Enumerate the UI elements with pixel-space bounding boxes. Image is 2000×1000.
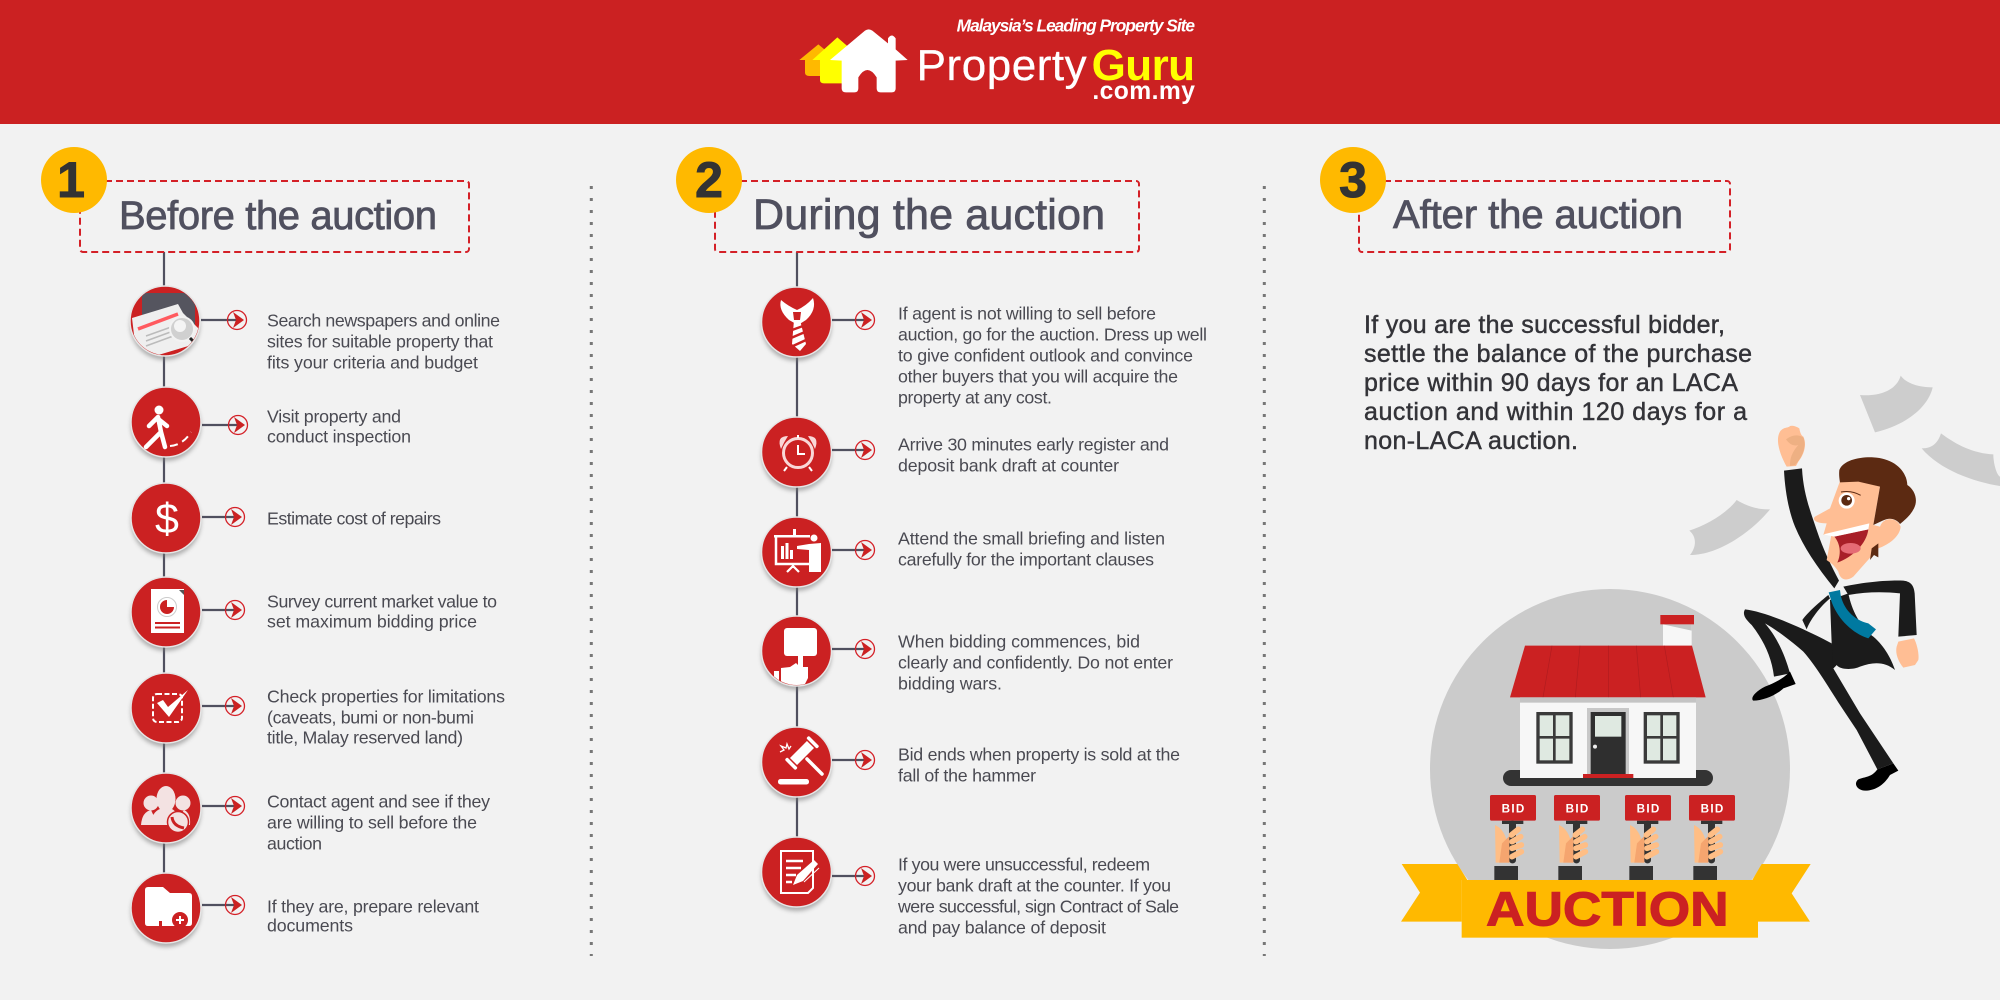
paragraph: settle the balance of the purchase xyxy=(1364,340,1752,368)
arrow xyxy=(202,600,244,620)
arrow xyxy=(832,750,874,770)
text: Bid ends when property is sold at the xyxy=(898,744,1180,764)
text xyxy=(267,406,411,446)
text: If you were unsuccessful, redeem xyxy=(898,854,1150,874)
logo: yellow house xyxy=(812,37,863,83)
text: auction xyxy=(267,833,322,853)
step: prepare documents xyxy=(131,873,479,947)
paragraph: price within 90 days for an LACA xyxy=(1364,369,1738,397)
raised arm xyxy=(1784,468,1839,588)
text xyxy=(897,854,1179,937)
text: auction, go for the auction. Dress up well xyxy=(898,324,1207,344)
icon: tie xyxy=(780,298,814,351)
flying paper 1 xyxy=(1860,376,1933,432)
text: your bank draft at the counter. If you xyxy=(898,875,1171,895)
text xyxy=(898,631,1173,693)
text: Attend the small briefing and listen xyxy=(898,528,1165,548)
shoe lower xyxy=(1856,763,1898,791)
icon: people and phone xyxy=(141,786,190,832)
text: carefully for the important clauses xyxy=(898,549,1154,569)
bid paddle 4: BID xyxy=(1701,803,1723,816)
step: check limitations xyxy=(131,673,505,747)
step: estimate repairs xyxy=(131,483,441,557)
text: Contact agent and see if they xyxy=(267,791,490,811)
heading: During the auction xyxy=(753,191,1105,239)
text: were successful, sign Contract of Sale xyxy=(897,896,1179,916)
step: dress up xyxy=(762,287,1207,407)
icon: folder xyxy=(145,887,192,928)
arrow xyxy=(201,310,246,330)
paragraph: non-LACA auction. xyxy=(1364,427,1578,455)
bid paddle 3 xyxy=(1625,795,1671,881)
panel: before the auction xyxy=(41,147,505,947)
icon: presenter xyxy=(774,529,821,572)
jacket xyxy=(1830,593,1895,670)
text: title, Malay reserved land) xyxy=(267,727,463,747)
bid paddle 3: BID xyxy=(1637,803,1659,816)
man figure xyxy=(1744,426,1919,791)
panel: after the auction xyxy=(1320,147,2000,949)
illustration: cheering man and papers xyxy=(1689,376,2000,791)
house walls xyxy=(1520,697,1696,778)
logo: orange house xyxy=(799,44,837,76)
logo xyxy=(799,16,1195,105)
heading: Before the auction xyxy=(119,194,437,238)
text: fits your criteria and budget xyxy=(267,352,478,372)
text: Arrive 30 minutes early register and xyxy=(898,434,1169,454)
text xyxy=(898,434,1169,475)
grey backdrop circle xyxy=(1430,589,1790,949)
icon: dollar: $ xyxy=(155,495,179,543)
text: are willing to sell before the xyxy=(267,812,477,832)
shoe upper xyxy=(1752,672,1796,701)
number badge 3 xyxy=(1320,147,1386,213)
bid paddle 1: BID xyxy=(1502,803,1524,816)
arrow xyxy=(202,508,244,526)
icon: gavel xyxy=(778,736,822,784)
divider right xyxy=(1263,186,1266,956)
flying paper 2 xyxy=(1922,433,2000,486)
text: sites for suitable property that xyxy=(267,331,493,351)
text: clearly and confidently. Do not enter xyxy=(898,652,1173,672)
face and ear xyxy=(1814,477,1901,579)
text: Estimate cost of repairs xyxy=(267,508,441,528)
panel: during the auction xyxy=(676,147,1207,937)
tie xyxy=(1829,590,1876,638)
bid paddle 4 xyxy=(1689,795,1735,881)
heading box xyxy=(80,181,469,252)
text xyxy=(898,744,1180,785)
illustration: auction house xyxy=(1401,589,1811,949)
house base xyxy=(1503,770,1713,786)
logo: tagline: Malaysia’s Leading Property Site xyxy=(957,16,1195,36)
icon: report with pie xyxy=(151,589,184,633)
paragraph xyxy=(1364,311,1752,455)
mouth xyxy=(1823,523,1869,563)
bid paddle 2 xyxy=(1554,795,1600,881)
text: Visit property and xyxy=(267,406,401,426)
arrow xyxy=(832,866,874,886)
connector line xyxy=(163,252,165,908)
text: and pay balance of deposit xyxy=(898,917,1106,937)
lowered hand xyxy=(1896,638,1919,668)
text: If agent is not willing to sell before xyxy=(898,303,1156,323)
lapel xyxy=(1802,595,1830,629)
flying paper 3 xyxy=(1689,500,1770,555)
roof xyxy=(1510,646,1706,697)
step: hammer falls xyxy=(762,727,1180,801)
logo: domain: .com.my xyxy=(1092,78,1195,105)
number badge 2: 2 xyxy=(695,152,723,208)
arrow xyxy=(202,416,248,434)
text xyxy=(898,528,1165,569)
heading: After the auction xyxy=(1393,193,1683,237)
text: other buyers that you will acquire the xyxy=(898,366,1178,386)
text: documents xyxy=(267,915,353,935)
text xyxy=(267,591,497,631)
text: If they are, prepare relevant xyxy=(267,896,479,916)
text xyxy=(267,310,500,372)
door xyxy=(1583,708,1633,778)
right window xyxy=(1645,714,1678,762)
number badge 1 xyxy=(41,147,107,213)
logo: Guru wordmark: Guru xyxy=(1092,41,1195,90)
text: bidding wars. xyxy=(898,673,1002,693)
number badge 3: 3 xyxy=(1339,152,1367,208)
step: survey market value xyxy=(131,577,497,651)
icon: checkbox xyxy=(153,690,188,722)
ribbon banner xyxy=(1401,864,1811,938)
arrow xyxy=(202,696,244,716)
raised fist xyxy=(1778,426,1805,467)
arrow xyxy=(832,640,874,658)
number badge 2 xyxy=(676,147,742,213)
text: fall of the hammer xyxy=(898,765,1036,785)
text xyxy=(267,686,505,747)
text: Search newspapers and online xyxy=(267,310,500,330)
header band xyxy=(0,0,2000,124)
arrow xyxy=(832,310,874,330)
text xyxy=(267,791,490,853)
connector line xyxy=(796,252,798,872)
icon: contract and pen xyxy=(781,851,819,893)
text xyxy=(898,303,1207,407)
step: redeem or sign xyxy=(762,837,1179,937)
heading box xyxy=(1359,181,1730,252)
divider left xyxy=(590,186,593,956)
text: conduct inspection xyxy=(267,426,411,446)
paragraph: auction and within 120 days for a xyxy=(1364,398,1747,426)
heading box xyxy=(715,181,1139,252)
text: to give confident outlook and convince xyxy=(898,345,1193,365)
text: deposit bank draft at counter xyxy=(898,455,1119,475)
icon: newspaper and magnifier xyxy=(132,293,202,356)
eye xyxy=(1839,491,1861,509)
arrow xyxy=(832,440,874,460)
chimney xyxy=(1660,615,1694,646)
text: property at any cost. xyxy=(898,387,1052,407)
arrow xyxy=(832,540,874,560)
arrow xyxy=(202,796,244,816)
text: set maximum bidding price xyxy=(267,611,477,631)
step: bidding commences xyxy=(762,616,1173,693)
bid paddle 2: BID xyxy=(1566,803,1588,816)
step: search newspapers xyxy=(130,286,500,372)
text xyxy=(267,896,479,935)
icon: walking person xyxy=(146,406,191,447)
banner label: AUCTION xyxy=(1486,882,1729,936)
icon: alarm clock xyxy=(780,435,816,471)
text: (caveats, bumi or non-bumi xyxy=(267,707,474,727)
logo: Property wordmark: Property xyxy=(917,41,1087,90)
number badge 1: 1 xyxy=(57,152,85,208)
step: visit property xyxy=(131,387,411,461)
legs xyxy=(1744,609,1893,769)
paragraph: If you are the successful bidder, xyxy=(1364,311,1725,339)
hair xyxy=(1839,457,1916,560)
step: contact agent xyxy=(131,773,490,853)
arrow xyxy=(202,896,244,914)
bid paddle 1 xyxy=(1490,795,1536,881)
left window xyxy=(1538,714,1571,762)
text: Survey current market value to xyxy=(267,591,497,611)
text: When bidding commences, bid xyxy=(898,631,1140,651)
lowered arm xyxy=(1843,581,1917,637)
icon: bid paddle xyxy=(774,628,817,686)
text: Check properties for limitations xyxy=(267,686,505,706)
logo: white house xyxy=(830,29,908,92)
step: attend briefing xyxy=(762,517,1165,591)
step: arrive early xyxy=(762,417,1169,491)
